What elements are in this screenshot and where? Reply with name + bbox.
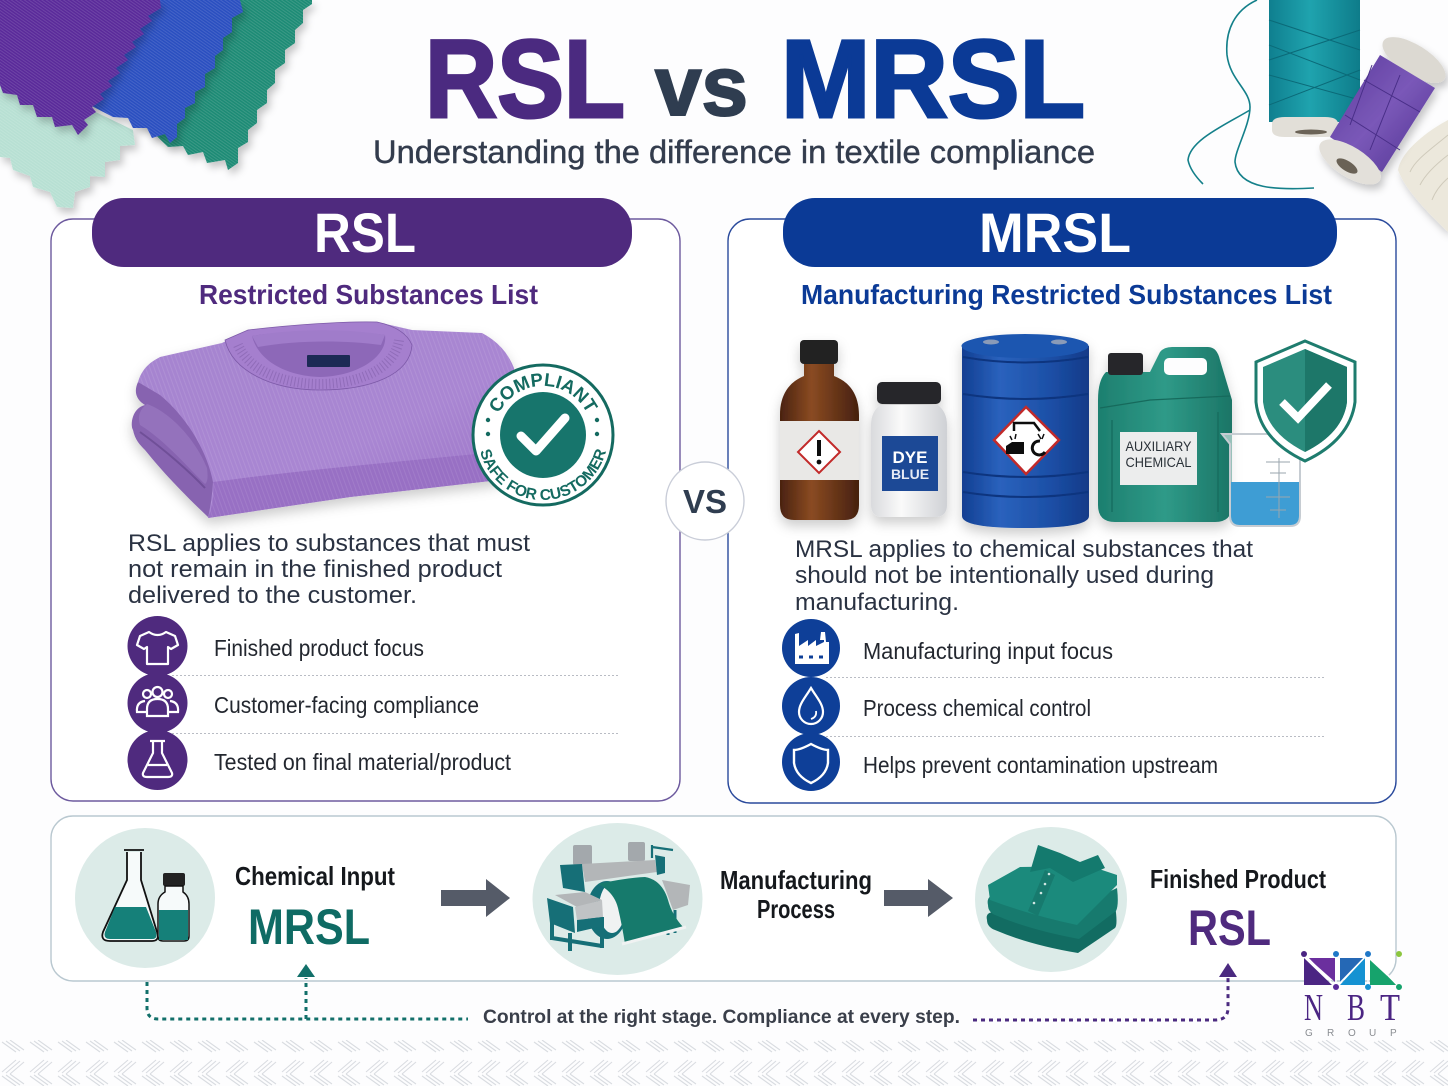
- green auxiliary chemical jug: [1098, 347, 1232, 522]
- VS badge: [666, 462, 744, 540]
- compliant badge: SAFE FOR CUSTOMER: [481, 449, 606, 500]
- body text: delivered to the customer.: [128, 582, 417, 609]
- step 2 illustration: machine: [532, 823, 702, 975]
- item: helps prevent contamination: Helps prevent contamination upstream: [863, 752, 1218, 778]
- heading pill: MRSL: [783, 198, 1337, 267]
- amber bottle: [780, 340, 859, 520]
- panel frame: [728, 219, 1396, 803]
- panel frame: [51, 219, 680, 801]
- item: finished product focus: Finished product focus: [214, 635, 424, 661]
- blue chemical drum: [962, 334, 1089, 528]
- item: process chemical control: [782, 677, 1091, 735]
- white dye jar: DYE: [893, 448, 927, 467]
- white dye jar: BLUE: [891, 466, 929, 482]
- white dye jar: [871, 382, 947, 517]
- step 3 label: [1150, 864, 1326, 956]
- item: customer-facing compliance: [128, 673, 479, 733]
- body text: not remain in the finished product: [128, 556, 502, 583]
- logo letters: B: [1347, 987, 1365, 1029]
- NBT group logo: [1301, 951, 1402, 1039]
- item: tested on final material: [128, 730, 512, 790]
- swatch: mint: [0, 80, 135, 208]
- thread spools: [1188, 0, 1448, 232]
- subheading: Restricted Substances List: [199, 279, 538, 310]
- step 2 label: Manufacturing: [720, 865, 872, 895]
- swatch: green: [130, 0, 312, 170]
- body text: [128, 530, 530, 609]
- step 2 label: Process: [757, 894, 835, 924]
- step 1 label: MRSL: [248, 899, 370, 955]
- step 2 label: [720, 865, 872, 924]
- beaker with blue liquid: [1222, 434, 1300, 526]
- title: vs: vs: [655, 39, 748, 133]
- item: manufacturing input focus: Manufacturing input focus: [863, 638, 1113, 664]
- shield with check: [1256, 341, 1355, 461]
- subheading: Manufacturing Restricted Substances List: [801, 279, 1332, 310]
- heading pill: RSL: [92, 198, 632, 267]
- step 3 label: RSL: [1188, 900, 1271, 956]
- compliant badge: [472, 364, 614, 506]
- spool: cream: [1398, 120, 1448, 232]
- item: manufacturing input focus: [782, 619, 1113, 677]
- green auxiliary chemical jug: CHEMICAL: [1126, 454, 1192, 470]
- dotted connector: RSL control: [973, 963, 1237, 1020]
- title: [425, 18, 1085, 141]
- tagline: Control at the right stage. Compliance at every step.: [483, 1007, 960, 1028]
- logo GROUP: GROUP: [1305, 1028, 1397, 1039]
- title: RSL: RSL: [425, 18, 625, 141]
- item: process chemical control: Process chemical control: [863, 695, 1091, 721]
- spool: teal: [1269, 0, 1360, 137]
- item: finished product focus: [128, 616, 424, 676]
- heading pill: RSL: RSL: [314, 201, 416, 264]
- logo letters: [1304, 987, 1400, 1029]
- subtitle: Understanding the difference in textile compliance: [373, 134, 1095, 170]
- step 3 label: Finished Product: [1150, 864, 1326, 894]
- folded sweater: [132, 322, 525, 518]
- green auxiliary chemical jug: AUXILIARY: [1126, 438, 1192, 454]
- body text: [795, 536, 1253, 616]
- arrow 2: [884, 879, 953, 917]
- logo letters: T: [1380, 987, 1400, 1029]
- arrow 1: [441, 879, 510, 917]
- step 1 illustration: chemicals: [75, 828, 215, 968]
- item: customer-facing compliance: Customer-facing compliance: [214, 692, 479, 718]
- step 1 label: Chemical Input: [235, 861, 395, 891]
- body text: should not be intentionally used during: [795, 562, 1214, 589]
- loose thread: [1188, 0, 1314, 189]
- item: helps prevent contamination: [782, 733, 1218, 791]
- swatch: purple: [0, 0, 161, 135]
- decorative woven band: [0, 1040, 1448, 1086]
- panel: RSL: [50, 198, 681, 802]
- body text: RSL applies to substances that must: [128, 530, 530, 557]
- title: MRSL: MRSL: [781, 18, 1085, 141]
- compliant badge: COMPLIANT: [490, 373, 598, 411]
- fabric swatches: [0, 0, 312, 208]
- panel: process flow: [51, 816, 1396, 981]
- heading pill: MRSL: MRSL: [979, 201, 1131, 264]
- step 1 label: [235, 861, 395, 955]
- body text: manufacturing.: [795, 589, 959, 616]
- spool: purple: [1312, 28, 1448, 193]
- logo mark: [1301, 951, 1402, 990]
- flow frame: [51, 816, 1396, 981]
- swatch: blue: [80, 0, 243, 143]
- dotted connector: MRSL control: [147, 964, 468, 1019]
- item: tested on final material: Tested on final material/product: [214, 749, 512, 775]
- body text: MRSL applies to chemical substances that: [795, 536, 1253, 563]
- logo letters: N: [1304, 987, 1323, 1029]
- panel: MRSL: [728, 198, 1396, 803]
- VS badge: VS: [683, 483, 727, 520]
- step 3 illustration: folded shirts: [975, 827, 1127, 972]
